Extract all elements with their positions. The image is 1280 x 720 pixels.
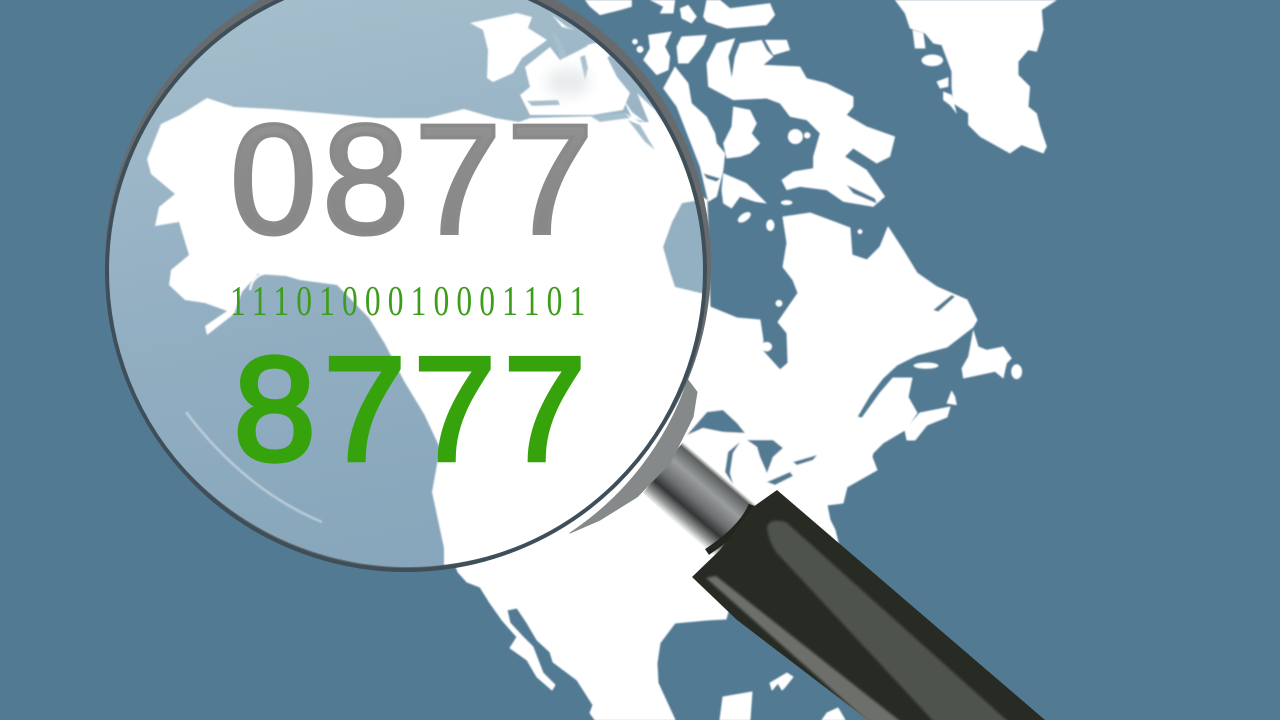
Great Lakes bbox=[687, 410, 817, 485]
metal ferrule bbox=[643, 442, 762, 560]
ferrule junction ring bbox=[707, 505, 752, 552]
lens thin coast arc bbox=[248, 273, 266, 291]
panel: magnifying lens view bbox=[109, 0, 703, 567]
lens channels bbox=[559, 48, 566, 58]
binary string: 1110100010001101 bbox=[230, 279, 592, 325]
handle collar bbox=[570, 380, 697, 533]
Newfoundland bbox=[914, 330, 1022, 405]
lens glass bbox=[107, 0, 705, 570]
lens smudge bbox=[546, 68, 590, 96]
Florida sliver bbox=[822, 708, 845, 720]
lens small islands bbox=[552, 16, 574, 30]
lens rim bbox=[105, 0, 711, 570]
Southampton blob in the basin bbox=[788, 125, 810, 144]
map: North America outside the lens bbox=[430, 0, 1057, 720]
handle lower highlight bbox=[706, 576, 905, 720]
Cuba bbox=[770, 673, 793, 690]
mainland bbox=[430, 190, 977, 720]
lens northern island bbox=[470, 13, 547, 82]
Nova Scotia bbox=[905, 407, 950, 440]
Arctic islands and Baffin bbox=[585, 0, 895, 351]
lens northern land bbox=[520, 43, 630, 115]
magnified map in lens bbox=[146, 12, 702, 565]
number 0877: 0877 bbox=[230, 93, 599, 267]
handle bbox=[692, 490, 1045, 720]
lens mainland bbox=[146, 97, 702, 565]
channel details bbox=[703, 173, 955, 312]
Greenland bbox=[895, 0, 1057, 153]
lens bay bbox=[662, 200, 703, 294]
number 8777: 8777 bbox=[234, 327, 594, 492]
lens reflection bbox=[186, 412, 322, 522]
handle body bbox=[692, 490, 1045, 720]
Yucatan peninsula bbox=[720, 692, 752, 720]
handle upper highlight bbox=[767, 521, 1012, 720]
